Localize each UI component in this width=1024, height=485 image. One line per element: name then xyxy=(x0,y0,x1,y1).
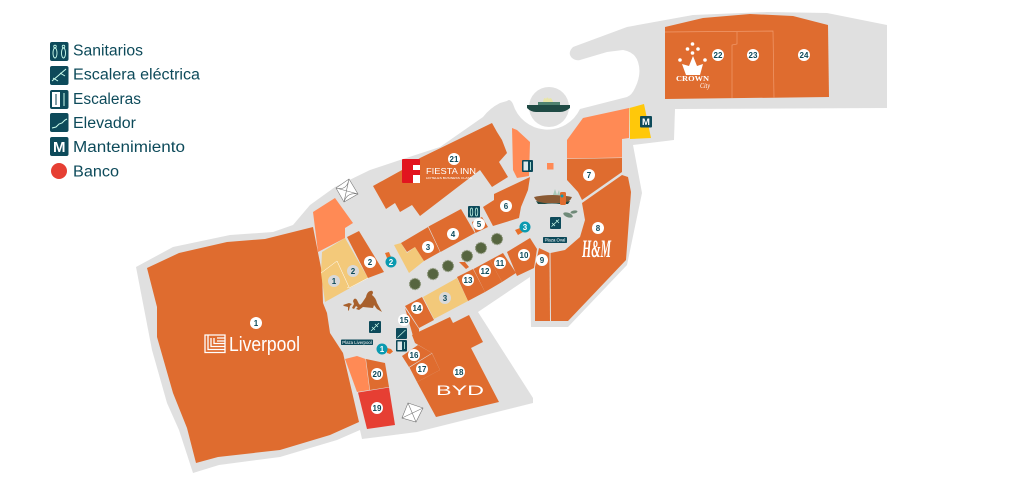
store numbers: 12 xyxy=(481,267,490,276)
store numbers: 17 xyxy=(418,365,427,374)
marker 2 xyxy=(385,252,396,268)
store numbers: 14 xyxy=(413,304,422,313)
store 9 xyxy=(535,248,550,321)
small kiosk xyxy=(547,163,554,170)
Crown City logo: City xyxy=(700,82,711,90)
store 2 xyxy=(347,231,384,278)
store numbers: 2 xyxy=(368,258,373,267)
icon: restrooms xyxy=(468,206,480,218)
store numbers: 7 xyxy=(587,171,592,180)
store 11 xyxy=(490,253,516,282)
Fiesta Inn logo: FIESTA INN xyxy=(426,167,476,176)
legend: Sanitarios: Sanitarios xyxy=(73,42,143,60)
marker 1: 1 xyxy=(380,345,385,354)
orange bench xyxy=(459,262,469,269)
store numbers: 18 xyxy=(455,368,464,377)
legend: Escaleras: Escaleras xyxy=(73,91,141,108)
light store top xyxy=(567,108,629,158)
trees xyxy=(410,234,502,290)
store numbers: 11 xyxy=(496,259,505,268)
legend: Banco: Banco xyxy=(73,164,119,180)
store numbers: 5 xyxy=(477,220,482,229)
label: Plaza Liverpool: Plaza Liverpool xyxy=(342,340,372,345)
store numbers: 9 xyxy=(540,256,545,265)
Fiesta Inn logo: HOTELES BUSINESS CLASS xyxy=(426,176,472,180)
store 19 bank xyxy=(358,388,395,429)
legend xyxy=(50,42,200,180)
yellow store 3 lower xyxy=(423,278,468,319)
yellow stores 1 and 2 xyxy=(321,238,368,302)
legend: Mantenimiento xyxy=(50,137,185,156)
icon: stairs north xyxy=(522,160,533,172)
icon: tent north xyxy=(336,179,358,202)
sculpture xyxy=(343,291,382,312)
store 13 xyxy=(457,269,485,301)
BYD logo: BYD xyxy=(436,382,484,398)
store 16 xyxy=(402,345,432,367)
store numbers: 20 xyxy=(373,370,382,379)
store numbers: 19 xyxy=(373,404,382,413)
store 10 xyxy=(507,238,537,276)
legend: Sanitarios xyxy=(50,42,143,61)
Crown City stores 22 23 24 xyxy=(665,14,829,99)
oval plaza fountain xyxy=(534,189,572,205)
label: Plaza Oval: Plaza Oval xyxy=(545,238,565,243)
store numbers: 8 xyxy=(596,224,601,233)
store numbers: 10 xyxy=(520,251,529,260)
store 14 xyxy=(405,297,434,328)
mall floor xyxy=(136,12,887,473)
store numbers: 13 xyxy=(464,276,473,285)
icon: elevator xyxy=(396,328,407,339)
store 6 xyxy=(483,177,530,226)
store numbers: 3 xyxy=(426,243,431,252)
icon: tent south xyxy=(402,403,423,422)
store numbers: 3 xyxy=(443,294,448,303)
light stores left xyxy=(313,198,353,252)
legend: Elevador: Elevador xyxy=(73,115,136,132)
store 21 Fiesta Inn xyxy=(373,123,508,216)
yellow maintenance store xyxy=(630,104,651,139)
legend: Banco xyxy=(51,163,119,180)
store numbers: 22 xyxy=(714,51,723,60)
Fiesta Inn logo xyxy=(402,159,476,183)
store 5 xyxy=(472,217,488,233)
store numbers: 23 xyxy=(749,51,758,60)
store numbers: 15 xyxy=(400,316,409,325)
Crown City logo xyxy=(676,42,711,90)
store numbers xyxy=(250,49,810,414)
fountain plaza circle xyxy=(529,87,569,127)
Liverpool logo xyxy=(205,335,225,352)
store 4 xyxy=(428,209,475,252)
strip 15 xyxy=(405,308,419,336)
store numbers: 6 xyxy=(504,202,509,211)
icon: stairs south xyxy=(396,340,407,352)
store 8 H&M: H&M xyxy=(582,236,611,263)
store numbers: 24 xyxy=(800,51,809,60)
store 17 xyxy=(410,354,440,382)
store 18 BYD xyxy=(412,315,499,417)
store numbers: 16 xyxy=(410,351,419,360)
icon: maintenance xyxy=(640,116,652,128)
store 1 Liverpool xyxy=(147,227,359,463)
legend: Escalera eléctrica: Escalera eléctrica xyxy=(73,66,200,84)
Crown City logo: CROWN xyxy=(676,75,709,83)
plant xyxy=(563,210,578,219)
store numbers: 4 xyxy=(451,230,456,239)
store 1 Liverpool: Liverpool xyxy=(229,334,300,356)
marker 3 xyxy=(515,222,530,235)
fountain xyxy=(527,98,570,112)
legend: Mantenimiento: Mantenimiento xyxy=(73,139,185,156)
icon: escalator Liverpool xyxy=(369,321,381,333)
legend: Elevador xyxy=(50,113,136,132)
store 20 xyxy=(366,359,389,390)
light store beside 20 xyxy=(345,356,370,392)
light strip store xyxy=(512,128,530,178)
store 8 H&M xyxy=(550,175,631,321)
icon: escalator Plaza Oval xyxy=(550,217,561,229)
legend: Mantenimiento: M xyxy=(53,139,65,156)
icon: maintenance: M xyxy=(642,117,650,128)
store numbers: 21 xyxy=(450,155,459,164)
store 7 xyxy=(567,158,622,200)
store numbers: 2 xyxy=(351,267,356,276)
store numbers: 1 xyxy=(254,319,259,328)
marker 3: 3 xyxy=(523,223,528,232)
marker 1 xyxy=(376,344,393,354)
store 3 upper xyxy=(401,227,440,261)
store numbers: 1 xyxy=(332,277,337,286)
legend: Escaleras xyxy=(50,90,141,109)
yellow store 3 upper xyxy=(394,243,424,273)
store 12 xyxy=(474,260,502,292)
marker 2: 2 xyxy=(389,258,394,267)
